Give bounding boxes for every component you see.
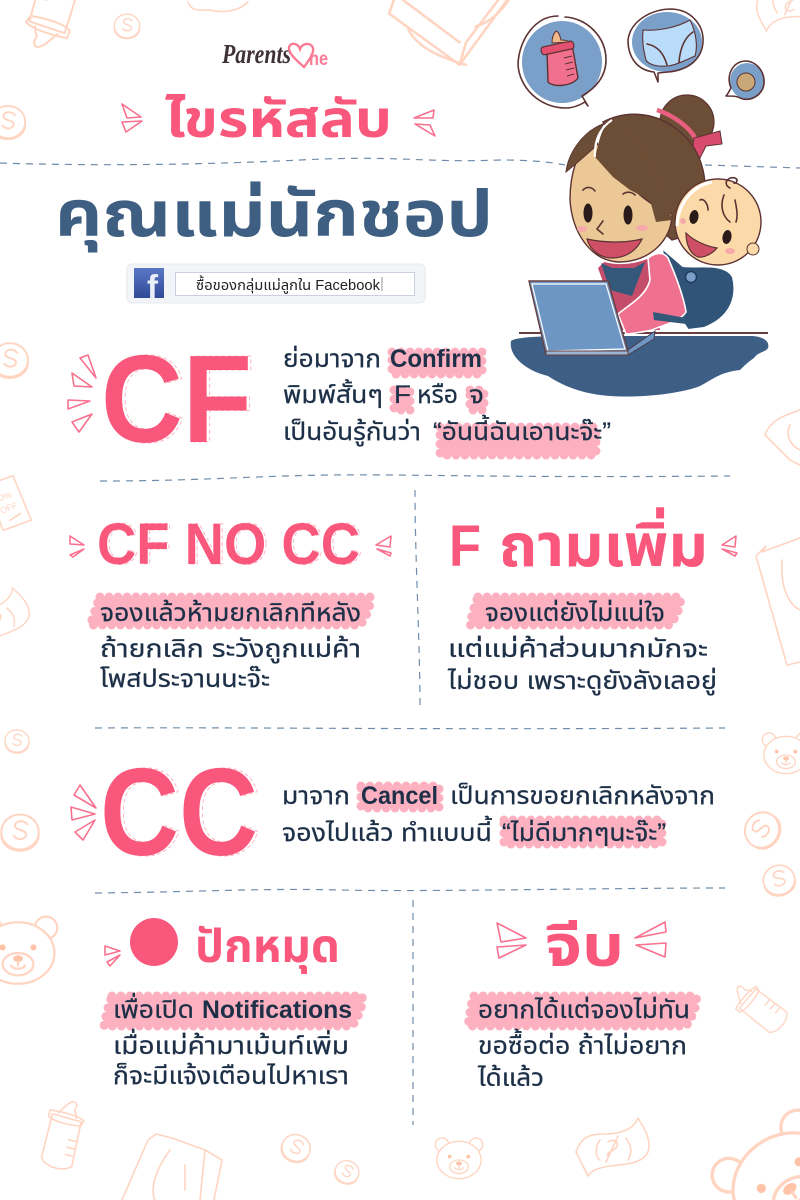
section: CF NO CC (70, 512, 391, 693)
CF NO CC description: จองแล้วห้ามยกเลิกทีหลัง (100, 599, 361, 627)
CC burst icon (71, 785, 96, 840)
band highlight (468, 996, 696, 1026)
F ถามเพิ่ม description: แต่แม่ค้าส่วนมากมักจะ (448, 635, 708, 663)
CF burst icon (68, 355, 96, 432)
CF NO CC description (100, 599, 361, 693)
ปักหมุด heading: ปักหมุด (195, 920, 340, 974)
จีบ description: ขอซื้อต่อ ถ้าไม่อยาก (478, 1028, 687, 1060)
จีบ description (477, 996, 690, 1092)
CF NO CC heading: CF NO CC (99, 512, 362, 577)
CF description: ย่อมาจาก (283, 345, 381, 373)
CF heading: CF (104, 331, 255, 469)
baby's head (675, 178, 761, 265)
section: ปักหมุด (104, 918, 362, 1090)
ปักหมุด description: ก็จะมีแจ้งเตือนไปหาเรา (113, 1062, 349, 1090)
ปักหมุด description (113, 992, 352, 1090)
CC heading: CC (103, 744, 261, 882)
logo: ParentsOne: ne (309, 49, 328, 70)
F ถามเพิ่ม description: จองแต่ยังไม่แน่ใจ (485, 599, 665, 627)
title: คุณแม่นักชอป: คุณแม่นักชอป (55, 178, 493, 253)
CF description: พิมพ์สั้นๆ (283, 378, 383, 409)
speech bubble: coin (726, 61, 764, 99)
facebook search bar: ซื้อของกลุ่มแม่ลูกใน Facebook (196, 275, 381, 294)
laptop (529, 281, 655, 355)
F ถามเพิ่ม description: ไม่ชอบ เพราะดูยังลังเลอยู่ (447, 667, 717, 696)
CC description (282, 782, 715, 847)
section: CC (71, 744, 715, 882)
table shadow (511, 336, 768, 397)
section: จีบ (468, 914, 696, 1092)
title: ไขรหัสลับ: ไขรหัสลับ (165, 91, 392, 149)
CF description: จ (469, 381, 484, 409)
CF description: เป็นอันรู้กันว่า (283, 418, 421, 447)
carrier (662, 248, 734, 330)
CC heading: CC (100, 744, 258, 882)
speech bubble: diaper (628, 9, 703, 82)
mother's head (566, 114, 705, 262)
F ถามเพิ่ม description (447, 599, 717, 696)
CF heading: CF (101, 331, 252, 469)
ปักหมุด description: เพื่อเปิด (113, 992, 194, 1024)
title: ไขรหัสลับ (122, 91, 435, 149)
CF NO CC heading: CF NO CC (97, 512, 360, 577)
facebook search bar: f (147, 268, 159, 305)
section: CF (68, 331, 611, 469)
CC description: เป็นการขอยกเลิกหลังจาก (450, 782, 715, 810)
CF description (283, 345, 611, 447)
CF NO CC description: ถ้ายกเลิก ระวังถูกแม่ค้า (100, 635, 361, 664)
F ถามเพิ่ม heading (449, 507, 737, 579)
ปักหมุด description: เมื่อแม่ค้ามาเม้นท์เพิ่ม (113, 1028, 349, 1060)
logo: ParentsOne: Parents (221, 39, 291, 69)
band highlight (90, 597, 370, 625)
F ถามเพิ่ม heading: ถามเพิ่ม (499, 507, 708, 579)
CF highlights (392, 352, 596, 455)
CC description: จองไปแล้ว ทำแบบนี้ (282, 815, 492, 847)
ปักหมุด heading (105, 918, 340, 974)
CF description: Confirm (390, 345, 482, 373)
band highlight (104, 996, 362, 1026)
CC highlights (361, 786, 662, 844)
CF description: F (394, 381, 411, 409)
illustration: mother shopping online with baby (511, 9, 768, 397)
จีบ heading: จีบ (545, 914, 624, 979)
CC description: “ไม่ดีมากๆนะจ๊ะ” (502, 819, 666, 847)
จีบ description: ได้แล้ว (477, 1064, 544, 1092)
CF NO CC description: โพสประจานนะจ๊ะ (100, 665, 270, 693)
CC description: Cancel (361, 782, 438, 810)
CC description: มาจาก (282, 782, 350, 810)
hair bun and ribbon (657, 95, 722, 158)
CF description: “อันนี้ฉันเอานะจ๊ะ” (433, 414, 611, 446)
ปักหมุด description: Notifications (202, 996, 352, 1024)
speech bubble: milk bottle (518, 16, 606, 108)
จีบ description: อยากได้แต่จองไม่ทัน (478, 996, 690, 1024)
CF description: หรือ (417, 381, 458, 409)
body (598, 258, 660, 330)
section: F ถามเพิ่ม (447, 507, 737, 696)
facebook search bar (127, 264, 425, 305)
จีบ heading (497, 914, 666, 979)
band highlight (470, 597, 680, 625)
F ถามเพิ่ม heading: F (449, 514, 481, 579)
